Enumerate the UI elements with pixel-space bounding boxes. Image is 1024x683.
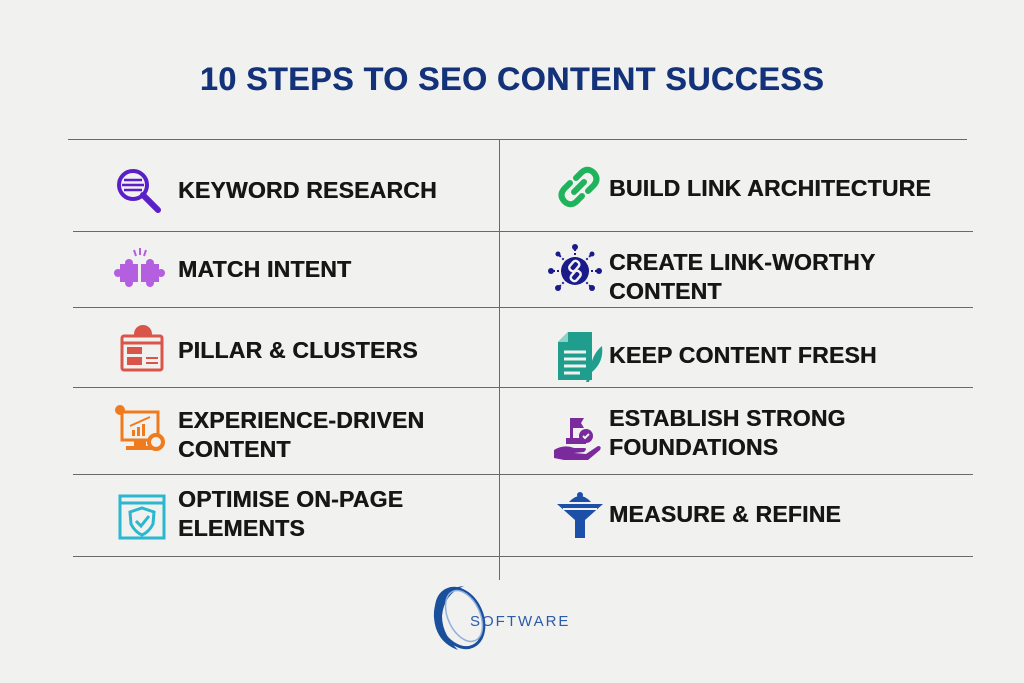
text: keep content fresh: KEEP CONTENT FRESH xyxy=(609,342,877,368)
icon: puzzle xyxy=(114,248,165,287)
text: experience-driven content: EXPERIENCE-DRIVEN xyxy=(178,407,424,433)
text: build link architecture: BUILD LINK ARCHITECTURE xyxy=(609,175,931,201)
text: experience-driven content: CONTENT xyxy=(178,436,291,462)
text: create link-worthy content: CREATE LINK-WORTHY xyxy=(609,249,875,275)
text: establish strong foundations xyxy=(609,405,846,460)
text: optimise on-page elements: OPTIMISE ON-PAGE xyxy=(178,486,403,512)
icon: hand with flag xyxy=(554,418,601,460)
text: match intent: MATCH INTENT xyxy=(178,256,351,282)
text: optimise on-page elements: ELEMENTS xyxy=(178,515,305,541)
icon: monitor chart xyxy=(115,405,165,451)
text: optimise on-page elements xyxy=(178,486,403,541)
title: 10 STEPS TO SEO CONTENT SUCCESS xyxy=(200,61,824,97)
text: experience-driven content xyxy=(178,407,424,462)
text: pillar & clusters: PILLAR & CLUSTERS xyxy=(178,337,418,363)
text: create link-worthy content: CONTENT xyxy=(609,278,722,304)
icon: document quill xyxy=(558,332,602,382)
icon: pillar page xyxy=(120,325,164,372)
text: create link-worthy content xyxy=(609,249,876,304)
text: establish strong foundations: ESTABLISH STRONG xyxy=(609,405,846,431)
icon: shield browser xyxy=(118,494,166,540)
icon: link hub xyxy=(548,244,602,291)
icon: link xyxy=(558,166,600,208)
icon: funnel gear xyxy=(557,492,603,538)
logo: SOFTWARE xyxy=(470,613,570,630)
icon: magnifier xyxy=(117,169,161,213)
panel: left column xyxy=(114,169,437,541)
text: measure & refine: MEASURE & REFINE xyxy=(609,501,841,527)
text: keyword research: KEYWORD RESEARCH xyxy=(178,177,437,203)
text: establish strong foundations: FOUNDATIONS xyxy=(609,434,778,460)
panel: right column xyxy=(548,166,931,538)
logo xyxy=(434,586,570,650)
